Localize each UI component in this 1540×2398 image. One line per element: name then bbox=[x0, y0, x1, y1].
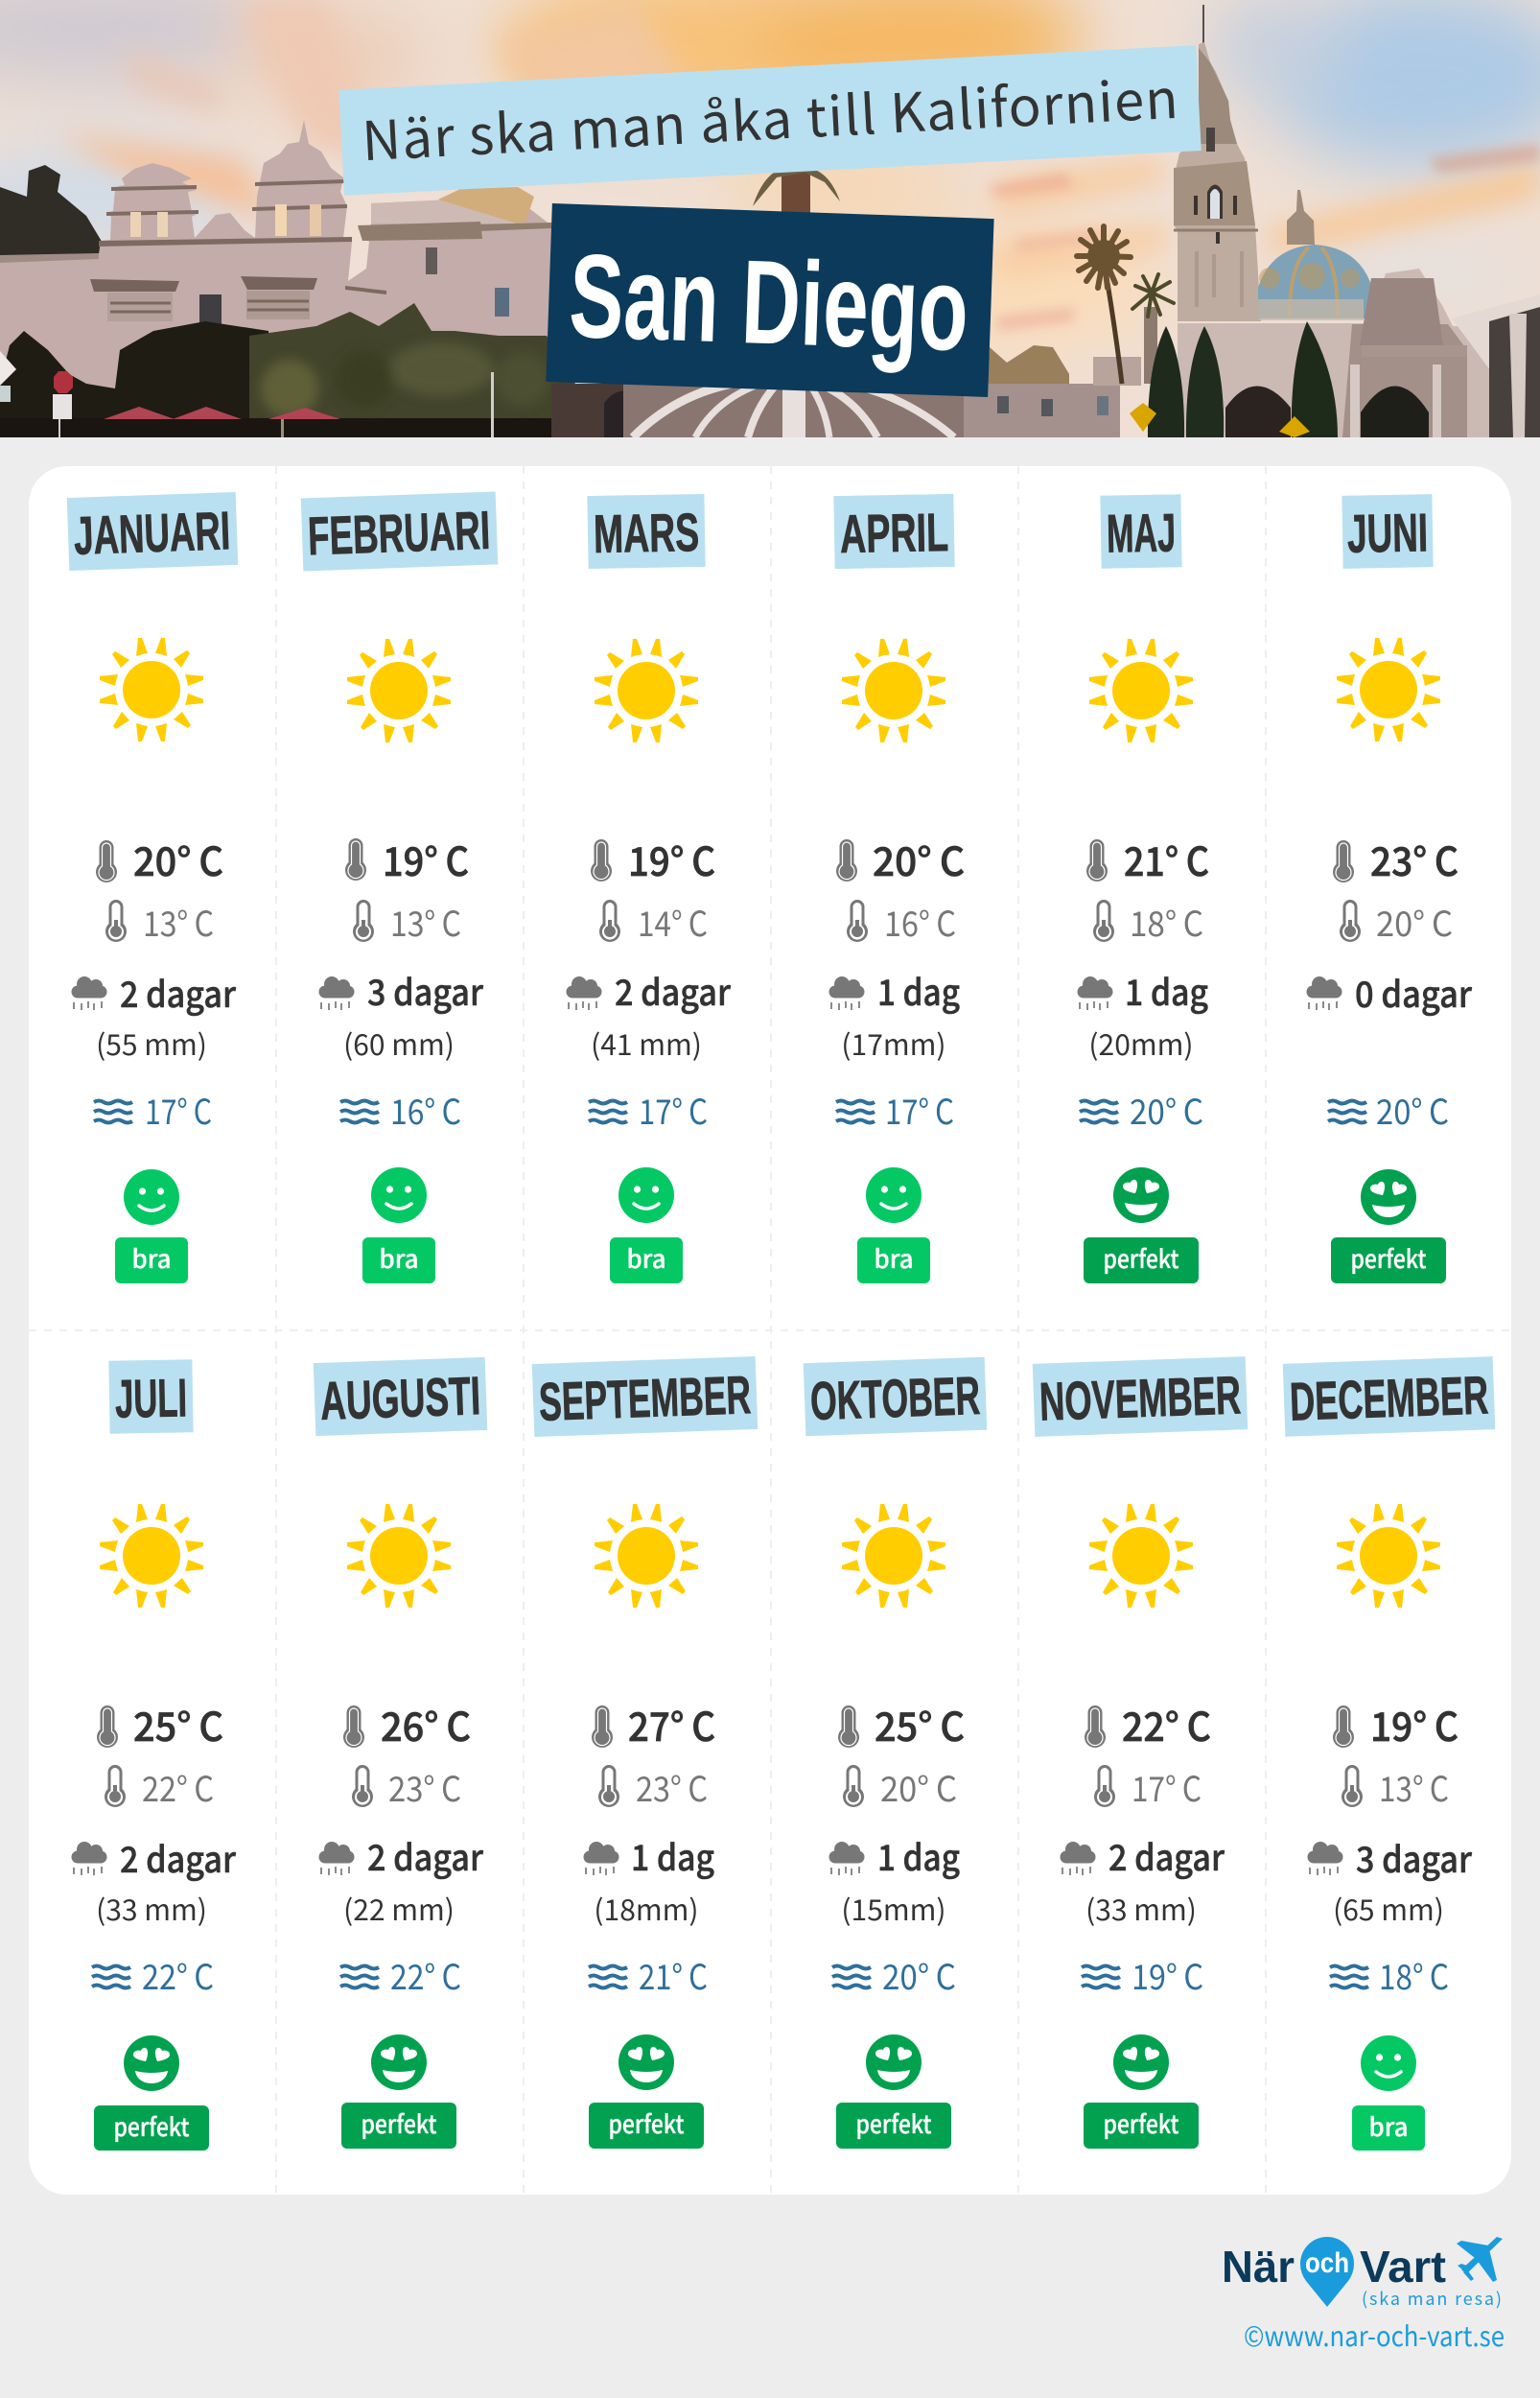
panel: monthly weather table bbox=[29, 466, 1511, 2195]
low temperature: 14° C bbox=[638, 897, 708, 947]
month heading bbox=[314, 1357, 487, 1436]
month heading bbox=[67, 492, 238, 571]
cypress trees bbox=[1148, 326, 1184, 437]
sea temperature: 21° C bbox=[639, 1950, 708, 2000]
month: Januari bbox=[67, 492, 238, 1283]
rating: bra bbox=[362, 1167, 435, 1283]
red umbrellas bbox=[104, 407, 340, 419]
high temperature: 27° C bbox=[628, 1695, 715, 1752]
low temperature: 23° C bbox=[388, 1762, 461, 1812]
sea temperature bbox=[340, 1950, 461, 2000]
month: April bbox=[828, 494, 965, 1283]
rating: perfekt: perfekt bbox=[608, 2105, 685, 2141]
rainfall: (22 mm) bbox=[343, 1887, 455, 1929]
rating: bra bbox=[115, 1169, 188, 1283]
high temperature bbox=[838, 1695, 965, 1752]
month heading: NOVEMBER bbox=[1038, 1364, 1242, 1432]
sea temperature bbox=[92, 1950, 214, 2000]
low temperature: 16° C bbox=[884, 897, 956, 947]
month: Oktober bbox=[804, 1357, 987, 2149]
high temperature: 26° C bbox=[381, 1695, 471, 1752]
sea temperature: 20° C bbox=[1130, 1085, 1203, 1135]
dome of California Building bbox=[1258, 245, 1372, 318]
month heading bbox=[587, 494, 706, 569]
sea temperature: 22° C bbox=[142, 1950, 214, 2000]
month: Augusti bbox=[314, 1357, 487, 2149]
month: Juni bbox=[1306, 494, 1473, 1283]
rating: perfekt bbox=[1084, 2034, 1199, 2149]
rain days bbox=[1078, 964, 1208, 1016]
low temperature bbox=[847, 897, 956, 947]
high temperature: 25° C bbox=[133, 1695, 223, 1752]
high temperature bbox=[96, 830, 223, 887]
low temperature: 13° C bbox=[1379, 1762, 1449, 1812]
high temperature bbox=[592, 1695, 715, 1752]
sea temperature: 22° C bbox=[390, 1950, 461, 2000]
icon: sun bbox=[842, 1504, 945, 1608]
rating: bra: bra bbox=[379, 1240, 419, 1276]
low temperature: 13° C bbox=[143, 897, 214, 947]
rain days: 2 dagar bbox=[120, 966, 237, 1018]
month heading: MARS bbox=[593, 502, 700, 564]
icon: map pin bbox=[1300, 2237, 1354, 2307]
title plate: San Diego: San Diego bbox=[568, 230, 970, 376]
month heading: FEBRUARI bbox=[307, 500, 491, 566]
sea temperature bbox=[1328, 1085, 1449, 1135]
sea temperature bbox=[1082, 1950, 1203, 2000]
sea temperature: 16° C bbox=[390, 1085, 461, 1135]
month: Juli bbox=[71, 1359, 237, 2151]
website credit: ©www.nar-och-vart.se bbox=[1244, 2315, 1505, 2355]
icon: sun bbox=[347, 1504, 451, 1608]
low temperature: 22° C bbox=[142, 1762, 214, 1812]
low temperature bbox=[598, 1762, 708, 1812]
high temperature bbox=[345, 830, 469, 887]
month heading: JANUARI bbox=[73, 500, 231, 566]
low temperature: 23° C bbox=[636, 1762, 708, 1812]
month heading bbox=[301, 491, 498, 572]
sea temperature bbox=[340, 1085, 461, 1135]
fountain bbox=[623, 382, 968, 437]
right low building bbox=[964, 384, 1120, 437]
rain days bbox=[1308, 1831, 1473, 1883]
title banner: När ska man åka till Kalifornien: När ska man åka till Kalifornien bbox=[360, 57, 1179, 176]
low temperature: 18° C bbox=[1130, 897, 1203, 947]
rain days: 2 dagar bbox=[120, 1831, 237, 1883]
high temperature: 20° C bbox=[873, 830, 965, 887]
rating: bra: bra bbox=[874, 1240, 914, 1276]
icon: sun bbox=[100, 638, 203, 741]
left tree bbox=[0, 165, 102, 255]
month heading bbox=[833, 494, 955, 569]
high temperature: 19° C bbox=[383, 830, 469, 887]
sea temperature: 17° C bbox=[885, 1085, 954, 1135]
rainfall: (65 mm) bbox=[1333, 1887, 1444, 1929]
low temperature: 20° C bbox=[1376, 897, 1453, 947]
logo: När och Vart: När bbox=[1222, 2242, 1295, 2292]
high temperature: 19° C bbox=[628, 830, 715, 887]
palms bbox=[1108, 283, 1122, 384]
month: Maj bbox=[1078, 494, 1209, 1283]
month: Februari bbox=[301, 491, 498, 1283]
month: September bbox=[532, 1356, 758, 2149]
high temperature bbox=[1333, 830, 1458, 887]
rain days bbox=[71, 1831, 237, 1883]
logo: När och Vart: (ska man resa) bbox=[1362, 2286, 1502, 2311]
low temperature bbox=[105, 1762, 214, 1812]
rating: bra bbox=[857, 1167, 930, 1283]
month heading bbox=[532, 1356, 758, 1437]
rating: bra: bra bbox=[1368, 2108, 1409, 2144]
sea temperature: 17° C bbox=[639, 1085, 708, 1135]
month heading: JUNI bbox=[1346, 502, 1429, 564]
rain days bbox=[828, 964, 960, 1016]
month heading: APRIL bbox=[839, 502, 949, 564]
month heading: SEPTEMBER bbox=[538, 1364, 752, 1432]
rain days bbox=[1306, 966, 1473, 1018]
sea temperature: 18° C bbox=[1379, 1950, 1449, 2000]
rainfall: (33 mm) bbox=[1085, 1887, 1197, 1929]
rain days bbox=[566, 964, 732, 1016]
rain days: 1 dag bbox=[1125, 964, 1208, 1016]
rain days bbox=[583, 1829, 714, 1881]
rating: perfekt: perfekt bbox=[1103, 1240, 1179, 1276]
rain days bbox=[318, 964, 484, 1016]
rainfall: (60 mm) bbox=[343, 1022, 455, 1064]
logo: När och Vart: och bbox=[1305, 2247, 1349, 2279]
low temperature bbox=[105, 897, 214, 947]
sea temperature bbox=[1080, 1085, 1203, 1135]
rainfall: (18mm) bbox=[594, 1887, 699, 1929]
month heading bbox=[108, 1359, 194, 1434]
high temperature bbox=[1086, 830, 1209, 887]
rain days: 1 dag bbox=[877, 1829, 960, 1881]
rating: perfekt bbox=[836, 2034, 951, 2149]
icon: sun bbox=[1337, 638, 1440, 741]
header photo: Balboa Park at sunset bbox=[0, 0, 1540, 437]
California Tower bbox=[1202, 5, 1204, 44]
high temperature: 23° C bbox=[1370, 830, 1458, 887]
sea temperature: 17° C bbox=[145, 1085, 212, 1135]
low temperature bbox=[1093, 897, 1203, 947]
high temperature: 19° C bbox=[1370, 1695, 1458, 1752]
month heading: AUGUSTI bbox=[319, 1365, 481, 1431]
month heading: OKTOBER bbox=[809, 1365, 981, 1431]
rating: perfekt bbox=[94, 2035, 209, 2151]
rainfall: (20mm) bbox=[1088, 1022, 1194, 1064]
rain days: 3 dagar bbox=[367, 964, 484, 1016]
month heading bbox=[1342, 494, 1434, 569]
sea temperature: 19° C bbox=[1132, 1950, 1203, 2000]
rating: bra bbox=[1352, 2035, 1425, 2151]
low temperature: 13° C bbox=[390, 897, 461, 947]
month heading: MAJ bbox=[1106, 502, 1177, 564]
sea temperature bbox=[94, 1085, 212, 1135]
low temperature bbox=[352, 1762, 461, 1812]
icon: sun bbox=[347, 639, 451, 742]
right dark building bbox=[1454, 295, 1540, 368]
month heading: JULI bbox=[114, 1367, 188, 1429]
rainfall: (33 mm) bbox=[96, 1887, 207, 1929]
icon: sun bbox=[1089, 1504, 1193, 1608]
low temperature bbox=[353, 897, 461, 947]
rain days: 2 dagar bbox=[367, 1829, 484, 1881]
rating: bra: bra bbox=[131, 1240, 172, 1276]
month heading bbox=[804, 1357, 987, 1436]
rain days bbox=[828, 1829, 960, 1881]
icon: sun bbox=[595, 1504, 698, 1608]
icon: sun bbox=[842, 639, 945, 742]
rainfall: (55 mm) bbox=[96, 1022, 207, 1064]
sea temperature bbox=[589, 1950, 708, 2000]
logo: När och Vart bbox=[1222, 2237, 1503, 2311]
street signs bbox=[54, 371, 73, 393]
sea temperature: 20° C bbox=[882, 1950, 956, 2000]
sea temperature bbox=[589, 1085, 708, 1135]
trees in front of left building bbox=[0, 321, 268, 418]
high temperature: 20° C bbox=[133, 830, 223, 887]
rain days bbox=[318, 1829, 484, 1881]
month: December bbox=[1283, 1356, 1495, 2151]
logo: När och Vart: Vart bbox=[1360, 2242, 1446, 2292]
rating: perfekt bbox=[589, 2034, 704, 2149]
yellow road signs bbox=[1130, 403, 1156, 432]
rating: perfekt: perfekt bbox=[113, 2108, 190, 2144]
high temperature bbox=[343, 1695, 471, 1752]
low temperature: 17° C bbox=[1132, 1762, 1202, 1812]
high temperature bbox=[591, 830, 715, 887]
rain days: 2 dagar bbox=[615, 964, 732, 1016]
rain days: 1 dag bbox=[631, 1829, 714, 1881]
sea temperature bbox=[1330, 1950, 1449, 2000]
rating: bra bbox=[610, 1167, 683, 1283]
low temperature: 20° C bbox=[880, 1762, 957, 1812]
rating: perfekt: perfekt bbox=[855, 2105, 932, 2141]
rain days: 3 dagar bbox=[1356, 1831, 1473, 1883]
high temperature: 21° C bbox=[1124, 830, 1209, 887]
month heading bbox=[1100, 494, 1182, 569]
rain days: 2 dagar bbox=[1108, 1829, 1225, 1881]
low temperature bbox=[1094, 1762, 1202, 1812]
rain days: 1 dag bbox=[877, 964, 960, 1016]
rating: perfekt bbox=[341, 2034, 456, 2149]
month: November bbox=[1033, 1356, 1248, 2149]
sea temperature bbox=[836, 1085, 954, 1135]
high temperature: 22° C bbox=[1122, 1695, 1211, 1752]
icon: sun bbox=[595, 639, 698, 742]
icon: airplane bbox=[1457, 2237, 1503, 2282]
rain days bbox=[1061, 1829, 1225, 1881]
rainfall: (15mm) bbox=[841, 1887, 946, 1929]
rating: perfekt: perfekt bbox=[1103, 2105, 1179, 2141]
high temperature bbox=[1085, 1695, 1211, 1752]
sea temperature bbox=[832, 1950, 956, 2000]
low temperature bbox=[1342, 1762, 1449, 1812]
high temperature bbox=[97, 1695, 223, 1752]
ornate building and arches bbox=[1178, 269, 1496, 437]
rainfall: (41 mm) bbox=[591, 1022, 702, 1064]
high temperature bbox=[1333, 1695, 1458, 1752]
month: Mars bbox=[566, 494, 732, 1283]
title plate: San Diego bbox=[546, 203, 994, 397]
rating: perfekt bbox=[1084, 1167, 1199, 1283]
rainfall: (17mm) bbox=[841, 1022, 946, 1064]
icon: sun bbox=[1337, 1504, 1440, 1608]
rain days bbox=[71, 966, 237, 1018]
icon: sun bbox=[100, 1504, 203, 1608]
sea temperature: 20° C bbox=[1376, 1085, 1449, 1135]
palm behind title bbox=[782, 173, 810, 213]
rain days: 0 dagar bbox=[1355, 966, 1473, 1018]
rating: bra: bra bbox=[626, 1240, 666, 1276]
rating: perfekt: perfekt bbox=[1350, 1240, 1427, 1276]
left mission building bbox=[0, 120, 551, 408]
icon: sun bbox=[1089, 639, 1193, 742]
low temperature bbox=[599, 897, 708, 947]
rating: perfekt bbox=[1331, 1169, 1446, 1283]
building left of fountain bbox=[551, 384, 623, 437]
low temperature bbox=[843, 1762, 957, 1812]
low temperature bbox=[1340, 897, 1453, 947]
month heading bbox=[1033, 1356, 1248, 1437]
high temperature: 25° C bbox=[875, 1695, 965, 1752]
rating: perfekt: perfekt bbox=[361, 2105, 437, 2141]
